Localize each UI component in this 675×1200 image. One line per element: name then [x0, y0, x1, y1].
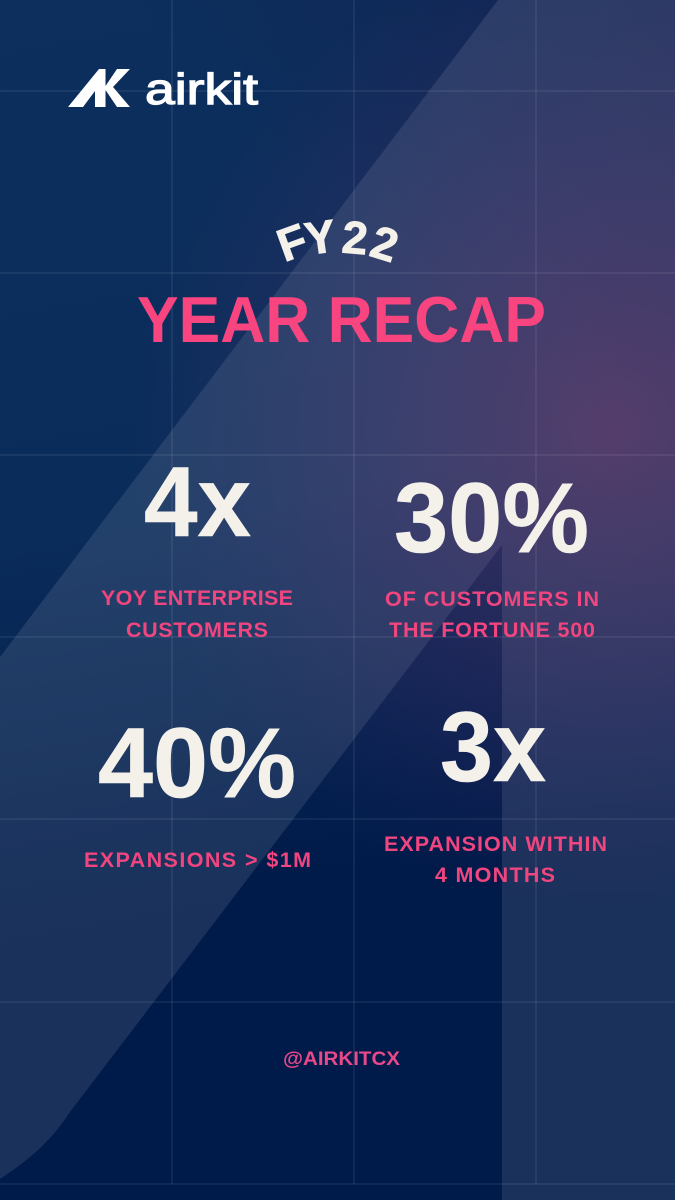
stat label: YOY ENTERPRISE	[101, 586, 293, 610]
stat label: THE FORTUNE 500	[389, 618, 595, 642]
title: YEAR RECAP: YEAR RECAP	[137, 283, 546, 356]
stat: 3x expansion: 3x	[440, 691, 546, 802]
curved heading: FY22: 2	[365, 215, 405, 272]
stat label: EXPANSIONS > $1M	[84, 848, 311, 872]
stat: 3x expansion	[384, 691, 607, 887]
stat label: EXPANSION WITHIN	[384, 832, 607, 856]
stat label: CUSTOMERS	[126, 618, 268, 642]
stat: 30% fortune 500: 30%	[394, 462, 589, 573]
social handle: @AIRKITCX	[283, 1049, 400, 1070]
stat label: 4 MONTHS	[435, 863, 555, 887]
stat: 30% fortune 500	[385, 462, 599, 642]
stat: 40% expansions	[84, 707, 311, 872]
curved heading: FY22: F	[270, 213, 314, 272]
stat: 4x enterprise customers	[101, 446, 293, 642]
curved heading: FY22	[270, 209, 405, 272]
logo wordmark: airkit	[145, 65, 258, 114]
logo: airkit	[68, 65, 258, 114]
curved heading: FY22: Y	[301, 209, 339, 265]
stat label: OF CUSTOMERS IN	[385, 587, 599, 611]
curved heading: FY22: 2	[340, 211, 370, 265]
icon: airkit mark	[68, 69, 130, 107]
stat: 40% expansions: 40%	[98, 707, 296, 818]
stat: 4x enterprise customers: 4x	[144, 446, 251, 557]
